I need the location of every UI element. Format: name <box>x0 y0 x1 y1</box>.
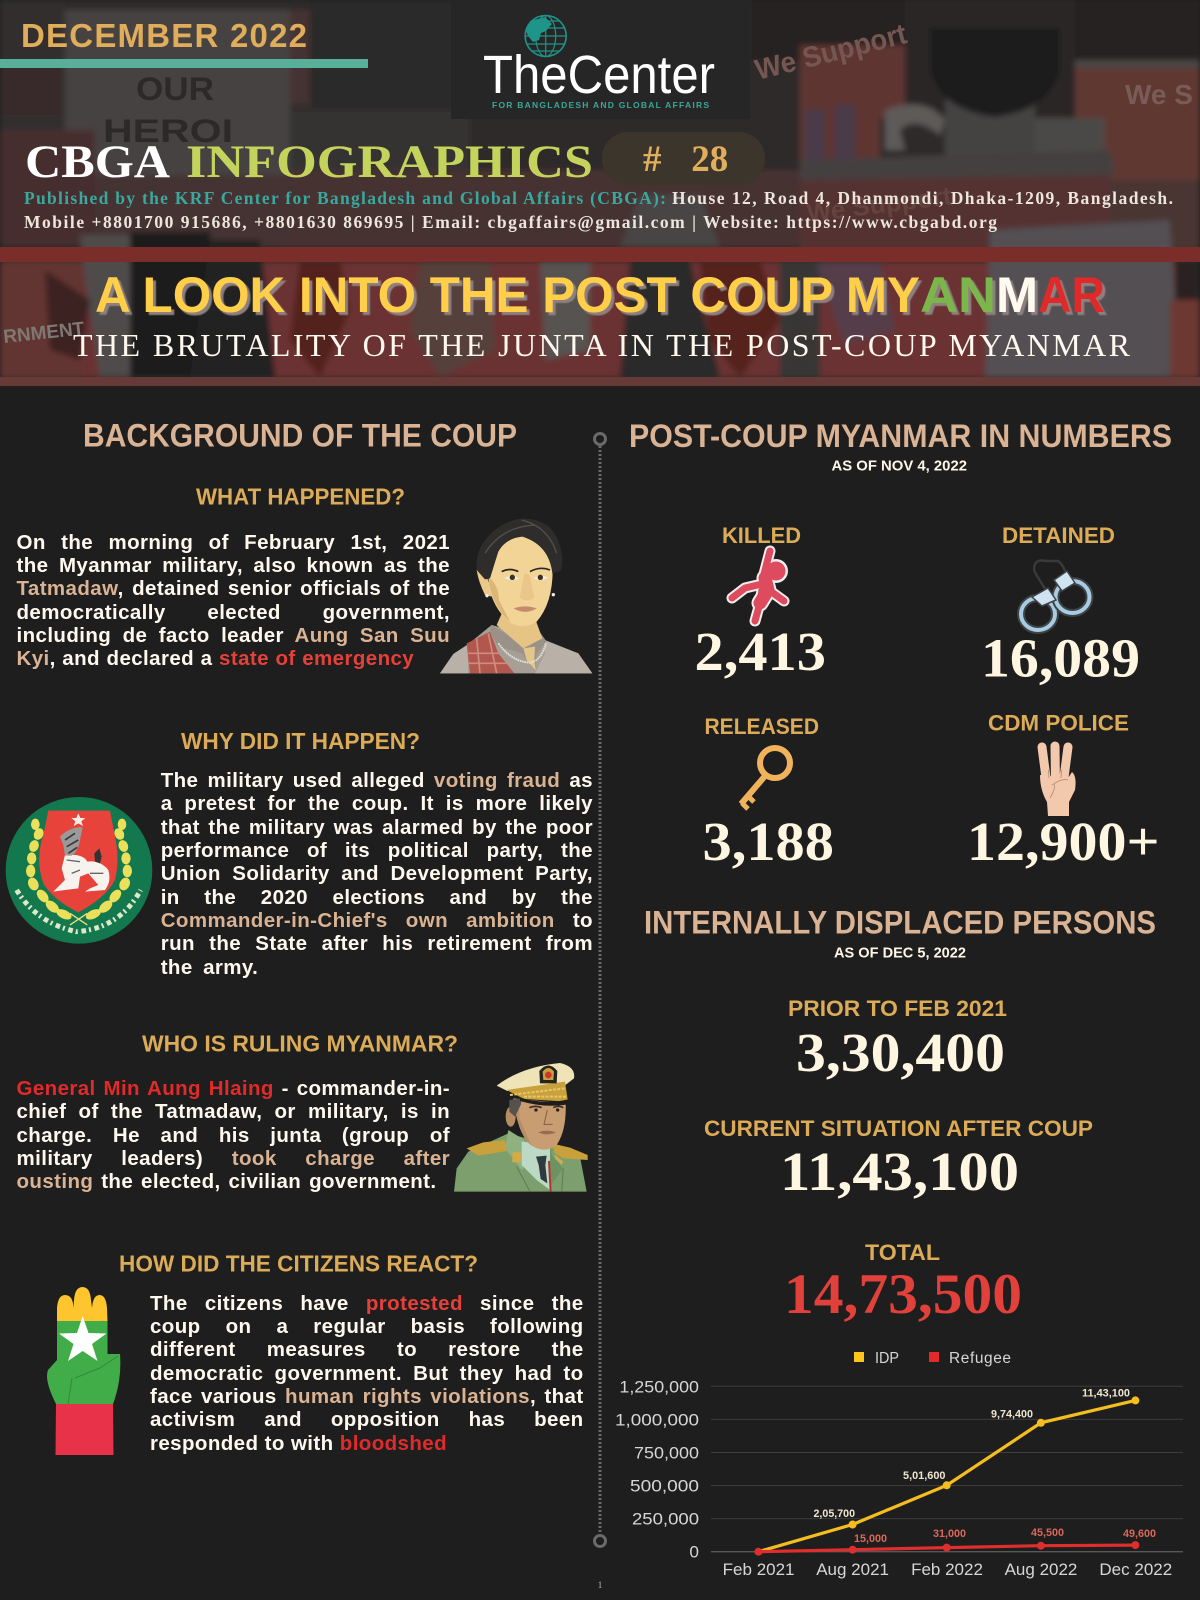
chart legend: Refugee <box>949 1350 1011 1367</box>
x axis labels: Feb 2021 <box>723 1560 795 1579</box>
stat: CDM police: CDM POLICE <box>988 711 1129 736</box>
icon: body outline <box>732 551 788 621</box>
text block: how did the citizens react: The citizens have protested since the <box>150 1292 584 1315</box>
note: as of Dec 5, 2022: AS OF DEC 5, 2022 <box>834 944 966 962</box>
stat: current situation: CURRENT SITUATION AFTER COUP <box>704 1116 1093 1141</box>
x axis labels: Aug 2022 <box>1005 1560 1077 1579</box>
icon: handcuffs <box>1021 560 1090 630</box>
stat: detained: 16,089 <box>981 628 1140 689</box>
y axis labels: 1,250,000 <box>619 1377 699 1396</box>
main title: A LOOK INTO THE POST COUP MY <box>95 267 920 323</box>
column divider <box>594 434 606 1546</box>
text block: what happened: democratically elected government, <box>16 601 450 624</box>
header photo of protesters: HEROI <box>103 113 233 149</box>
y axis labels: 500,000 <box>630 1476 699 1496</box>
IDP line: 9,74,400 <box>991 1409 1033 1421</box>
stat: killed: 2,413 <box>694 621 826 682</box>
stat: released: RELEASED <box>704 714 819 739</box>
stat: CDM police <box>967 711 1160 872</box>
refugee line: 31,000 <box>933 1528 966 1540</box>
heading: how did the citizens react: HOW DID THE CITIZENS REACT? <box>119 1250 478 1276</box>
icon: globe <box>525 15 566 56</box>
stat: prior to Feb 2021: 3,30,400 <box>796 1022 1005 1083</box>
IDP line: 5,01,600 <box>903 1470 946 1482</box>
issue number badge: # <box>643 139 662 180</box>
y axis labels <box>615 1377 699 1562</box>
stat: prior to Feb 2021: PRIOR TO FEB 2021 <box>788 996 1007 1021</box>
stat: detained: DETAINED <box>1002 523 1115 548</box>
text block: how did the citizens react: activism and opposition has been <box>150 1408 584 1431</box>
text block: what happened: including de facto leader Aung San Suu <box>16 624 450 647</box>
logo: The Center: TheCenter <box>483 45 715 105</box>
stat: total: 14,73,500 <box>784 1263 1022 1326</box>
text block: who is ruling Myanmar: chief of the Tatmadaw, or military, is in <box>16 1100 450 1123</box>
text block: who is ruling Myanmar: military leaders) took charge after <box>16 1147 450 1170</box>
note: as of Nov 4, 2022: AS OF NOV 4, 2022 <box>832 458 967 474</box>
heading: background of the coup: BACKGROUND OF THE COUP <box>83 418 517 454</box>
text block: who is ruling Myanmar: General Min Aung Hlaing - commander-in- <box>16 1077 450 1100</box>
icon: key <box>741 748 790 809</box>
text block: why did it happen <box>160 769 593 979</box>
page number: 1 <box>598 1580 602 1590</box>
stat: released <box>702 714 834 872</box>
publisher address line: Published by the KRF Center for Bangladesh and Global Affairs (CBGA): <box>24 188 666 208</box>
y axis labels: 0 <box>689 1543 699 1562</box>
header photo of protesters: We S <box>1125 79 1193 110</box>
text block: why did it happen: a pretest for the coup. It is more likely <box>161 792 593 815</box>
emblem: Union Solidarity and Development Party <box>6 797 152 944</box>
header photo of protesters: We Support <box>805 180 953 228</box>
refugee line: 49,600 <box>1123 1528 1156 1540</box>
header photo of protesters: We Support <box>752 18 910 87</box>
line chart: IDP and refugee <box>615 1350 1183 1579</box>
text block: what happened <box>16 531 450 670</box>
y axis labels: 250,000 <box>632 1510 699 1529</box>
heading: why did it happen: WHY DID IT HAPPEN? <box>181 728 420 754</box>
x axis labels <box>723 1560 1172 1579</box>
heading: what happened: WHAT HAPPENED? <box>196 484 405 510</box>
stat: CDM police: 12,900+ <box>967 811 1160 872</box>
heading: internally displaced persons: INTERNALLY DISPLACED PERSONS <box>644 904 1156 940</box>
header banner <box>0 0 1200 386</box>
issue number badge <box>602 132 765 185</box>
contact line: Mobile +8801700 915686, +8801630 869695 | Email: cbgaffairs@gmail.com | Website: https://www.cbgabd.org <box>24 212 997 232</box>
portrait: Aung San Suu Kyi <box>440 519 592 673</box>
publication title <box>25 136 593 188</box>
main title: M <box>996 267 1038 323</box>
heading: who is ruling Myanmar: WHO IS RULING MYANMAR? <box>142 1030 458 1056</box>
text block: who is ruling Myanmar: ousting the elected, civilian government. <box>16 1170 436 1193</box>
stat: detained <box>981 523 1140 689</box>
text block: what happened: Kyi, and declared a state of emergency <box>16 647 414 670</box>
text block: why did it happen: The military used alleged voting fraud as <box>161 769 593 792</box>
refugee line: 15,000 <box>854 1533 887 1545</box>
top band: date strip <box>0 59 368 68</box>
stat: total: TOTAL <box>865 1240 940 1265</box>
text block: why did it happen: Union Solidarity and Development Party, <box>161 862 593 885</box>
stat: released: 3,188 <box>702 811 834 872</box>
IDP line: 11,43,100 <box>1082 1388 1130 1400</box>
main title: AR <box>1038 267 1105 323</box>
text block: why did it happen: performance of its political party, the <box>161 839 593 862</box>
refugee line <box>754 1527 1156 1556</box>
text block: what happened: On the morning of February 1st, 2021 <box>16 531 450 554</box>
logo: The Center: FOR BANGLADESH AND GLOBAL AFFAIRS <box>492 100 709 110</box>
text block: how did the citizens react: face various human rights violations, that <box>150 1385 584 1408</box>
text block: what happened: the Myanmar military, also known as the <box>16 554 450 577</box>
IDP line: 2,05,700 <box>814 1508 855 1520</box>
text block: who is ruling Myanmar: charge. He and his junta (group of <box>16 1124 450 1147</box>
x axis labels: Dec 2022 <box>1099 1560 1172 1579</box>
subtitle: THE BRUTALITY OF THE JUNTA IN THE POST-COUP MYANMAR <box>73 327 1131 363</box>
text block: who is ruling Myanmar <box>16 1077 450 1193</box>
header photo of protesters: RNMENT <box>2 319 86 348</box>
text block: how did the citizens react: different measures to restore the <box>150 1338 584 1361</box>
text block: why did it happen: that the military was alarmed by the poor <box>161 816 593 839</box>
y axis labels: 1,000,000 <box>615 1410 699 1429</box>
main title: AN <box>920 267 996 323</box>
text block: why did it happen: Commander-in-Chief's own ambition to <box>161 909 593 932</box>
icon: three finger hand <box>1040 746 1076 816</box>
header photo of protesters: OUR <box>136 71 214 107</box>
issue number badge: 28 <box>682 139 728 180</box>
text block: how did the citizens react <box>150 1292 584 1455</box>
chart legend <box>854 1350 1011 1367</box>
text block: why did it happen: in the 2020 elections and by the <box>161 886 593 909</box>
portrait: General Min Aung Hlaing <box>454 1063 588 1192</box>
text block: how did the citizens react: coup on a regular basis following <box>150 1315 584 1338</box>
header photo of protesters <box>0 0 1200 386</box>
icon: flag-coloured three finger salute <box>47 1287 120 1455</box>
publication title: CBGA <box>25 136 170 188</box>
x axis labels: Aug 2021 <box>816 1560 889 1579</box>
text block: why did it happen: the army. <box>161 956 258 979</box>
heading: post-coup Myanmar in numbers: POST-COUP MYANMAR IN NUMBERS <box>629 418 1172 454</box>
text block: how did the citizens react: democratic government. But they had to <box>150 1362 584 1385</box>
publisher address line: House 12, Road 4, Dhanmondi, Dhaka-1209, Bangladesh. <box>672 188 1173 208</box>
publisher address line <box>24 188 1173 208</box>
y axis labels: 750,000 <box>634 1444 699 1462</box>
chart legend: IDP <box>875 1350 899 1367</box>
x axis labels: Feb 2022 <box>911 1560 983 1579</box>
date heading: DECEMBER 2022 <box>21 17 307 54</box>
text block: how did the citizens react: responded to with bloodshed <box>150 1432 447 1455</box>
logo: The Center <box>451 0 750 119</box>
refugee line: 45,500 <box>1031 1527 1064 1539</box>
stat: prior to Feb 2021 <box>788 996 1007 1083</box>
red band above title <box>0 247 1200 262</box>
stat: current situation <box>704 1116 1093 1202</box>
stat: current situation: 11,43,100 <box>780 1141 1019 1202</box>
publication title: INFOGRAPHICS <box>186 136 593 188</box>
text block: what happened: Tatmadaw, detained senior officials of the <box>16 577 450 600</box>
stat: killed: KILLED <box>722 523 801 548</box>
IDP line <box>758 1388 1139 1552</box>
stat: killed <box>694 523 826 682</box>
text block: why did it happen: run the State after his retirement from <box>161 932 593 955</box>
red band below title <box>0 377 1200 386</box>
